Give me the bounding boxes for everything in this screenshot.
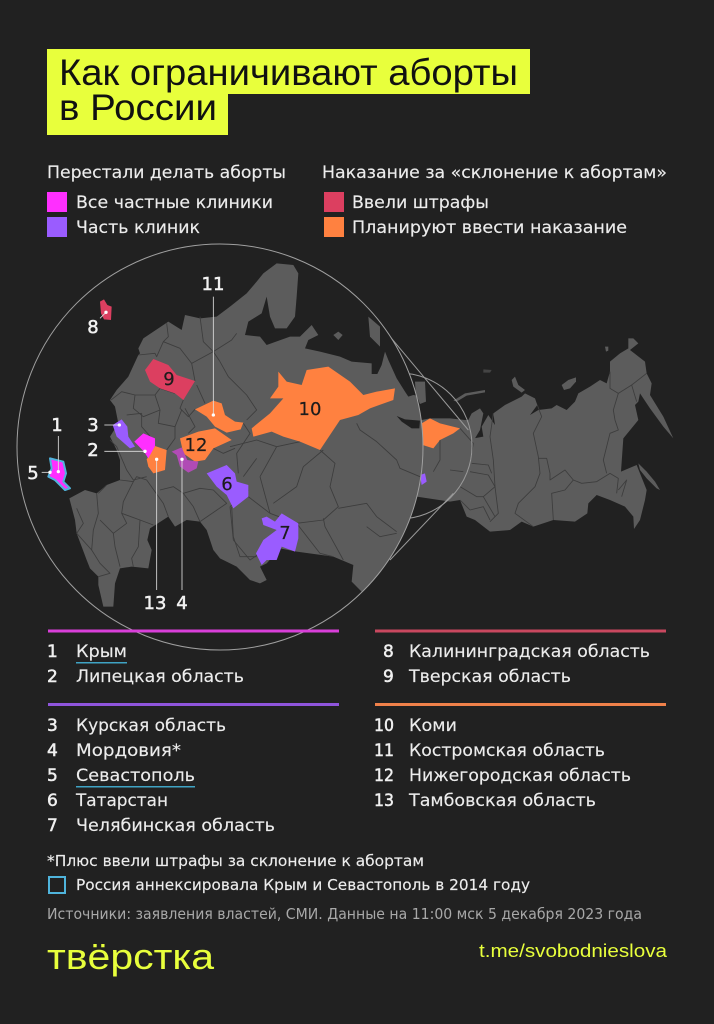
list: planning punishment: Коми (409, 716, 457, 736)
list: planning punishment: Тамбовская область (408, 791, 596, 811)
title: Как ограничивают аборты (59, 52, 518, 93)
map leader lines (42, 297, 213, 590)
list: all private clinics: 1 (47, 642, 58, 662)
map number labels (27, 274, 321, 614)
legend: stopped abortions: Все частные клиники (76, 193, 273, 213)
region 9: Tver (145, 359, 195, 400)
internal borders, south-west (77, 477, 257, 577)
map number labels: 2 (87, 440, 99, 461)
map number labels: 9 (163, 369, 175, 390)
map number labels: 12 (185, 435, 207, 456)
legend: punishment: Ввели штрафы (352, 193, 489, 213)
map number labels: 10 (299, 399, 321, 420)
list: planning punishment (374, 703, 666, 811)
large zoomed map (47, 263, 422, 607)
regions of the central cluster (113, 359, 243, 473)
region 10: Komi (252, 367, 395, 450)
list: some clinics: Мордовия* (76, 741, 181, 761)
region 2: Lipetsk (134, 433, 155, 458)
list: some clinics: 6 (47, 791, 58, 811)
legend: stopped abortions: Перестали делать аборты (47, 163, 286, 183)
small overview map (350, 338, 673, 532)
region 6: Tatarstan (207, 465, 248, 508)
tangent lines and small circle (326, 327, 472, 560)
list: fines introduced: Тверская область (408, 667, 571, 687)
list: some clinics: 4 (47, 741, 58, 761)
sources: Источники: заявления властей, СМИ. Данные на 11:00 мск 5 декабря 2023 года (47, 905, 642, 923)
map of Russia (17, 244, 673, 650)
map number labels: 3 (87, 415, 99, 436)
list: all private clinics: Липецкая область (76, 667, 244, 687)
region 4: Mordovia (172, 447, 198, 473)
list: planning punishment: 10 (374, 716, 394, 736)
leader end dots (48, 311, 215, 474)
region 11: Kostroma (195, 401, 243, 433)
region 13: Tambov (147, 446, 167, 473)
regions 1 and 5: Crimea and Sevastopol (48, 458, 70, 490)
legend: punishment: Наказание за «склонение к абортам» (322, 163, 667, 183)
map number labels: 5 (27, 463, 39, 484)
list: some clinics: Челябинская область (76, 816, 275, 836)
list: some clinics: Севастополь (76, 766, 195, 786)
list: planning punishment: Костромская область (409, 741, 605, 761)
region 7: Chelyabinsk (256, 513, 298, 565)
list: planning punishment: 12 (374, 766, 394, 786)
list: planning punishment: Нижегородская область (409, 766, 631, 786)
legend: stopped abortions (47, 163, 286, 238)
internal borders, centre (110, 323, 257, 480)
footnote: annexation with blue square: Россия аннексировала Крым и Севастополь в 2014 году (76, 876, 530, 894)
map number labels: 8 (87, 317, 99, 338)
list: planning punishment: 11 (374, 741, 394, 761)
logo: твёрстка (47, 936, 215, 977)
footnote: fines: *Плюс ввели штрафы за склонение к абортам (47, 852, 424, 870)
region 12: Nizhny Novgorod (180, 428, 232, 462)
map number labels: 4 (176, 593, 188, 614)
list: some clinics: Курская область (76, 716, 226, 736)
list: fines introduced: 9 (383, 667, 394, 687)
list: all private clinics: Крым (76, 642, 127, 662)
region 3: Kursk (113, 419, 135, 448)
map number labels: 7 (279, 523, 291, 544)
legend: punishment: Планируют ввести наказание (352, 218, 627, 238)
list: some clinics: 5 (47, 766, 58, 786)
list: all private clinics: 2 (47, 667, 58, 687)
legend: stopped abortions: Часть клиник (76, 218, 200, 238)
title (47, 49, 530, 135)
list: fines introduced: 8 (383, 642, 394, 662)
list: some clinics: Татарстан (75, 791, 168, 811)
map number labels: 13 (144, 593, 166, 614)
list: some clinics (47, 703, 339, 836)
list: planning punishment: 13 (374, 791, 394, 811)
list: some clinics: 3 (47, 716, 58, 736)
legend: punishment (322, 163, 667, 238)
map number labels: 6 (221, 474, 233, 495)
telegram link: t.me/svobodnieslova (479, 941, 668, 961)
list: all private clinics (47, 630, 339, 687)
list: fines introduced: Калининградская область (409, 642, 650, 662)
title: в России (59, 87, 217, 128)
region 8: Kaliningrad (100, 299, 112, 320)
map number labels: 1 (51, 415, 63, 436)
list: fines introduced (375, 630, 666, 687)
map number labels: 11 (202, 274, 224, 295)
internal borders, east (200, 317, 420, 560)
big circle outline (17, 244, 423, 650)
list: some clinics: 7 (47, 816, 58, 836)
